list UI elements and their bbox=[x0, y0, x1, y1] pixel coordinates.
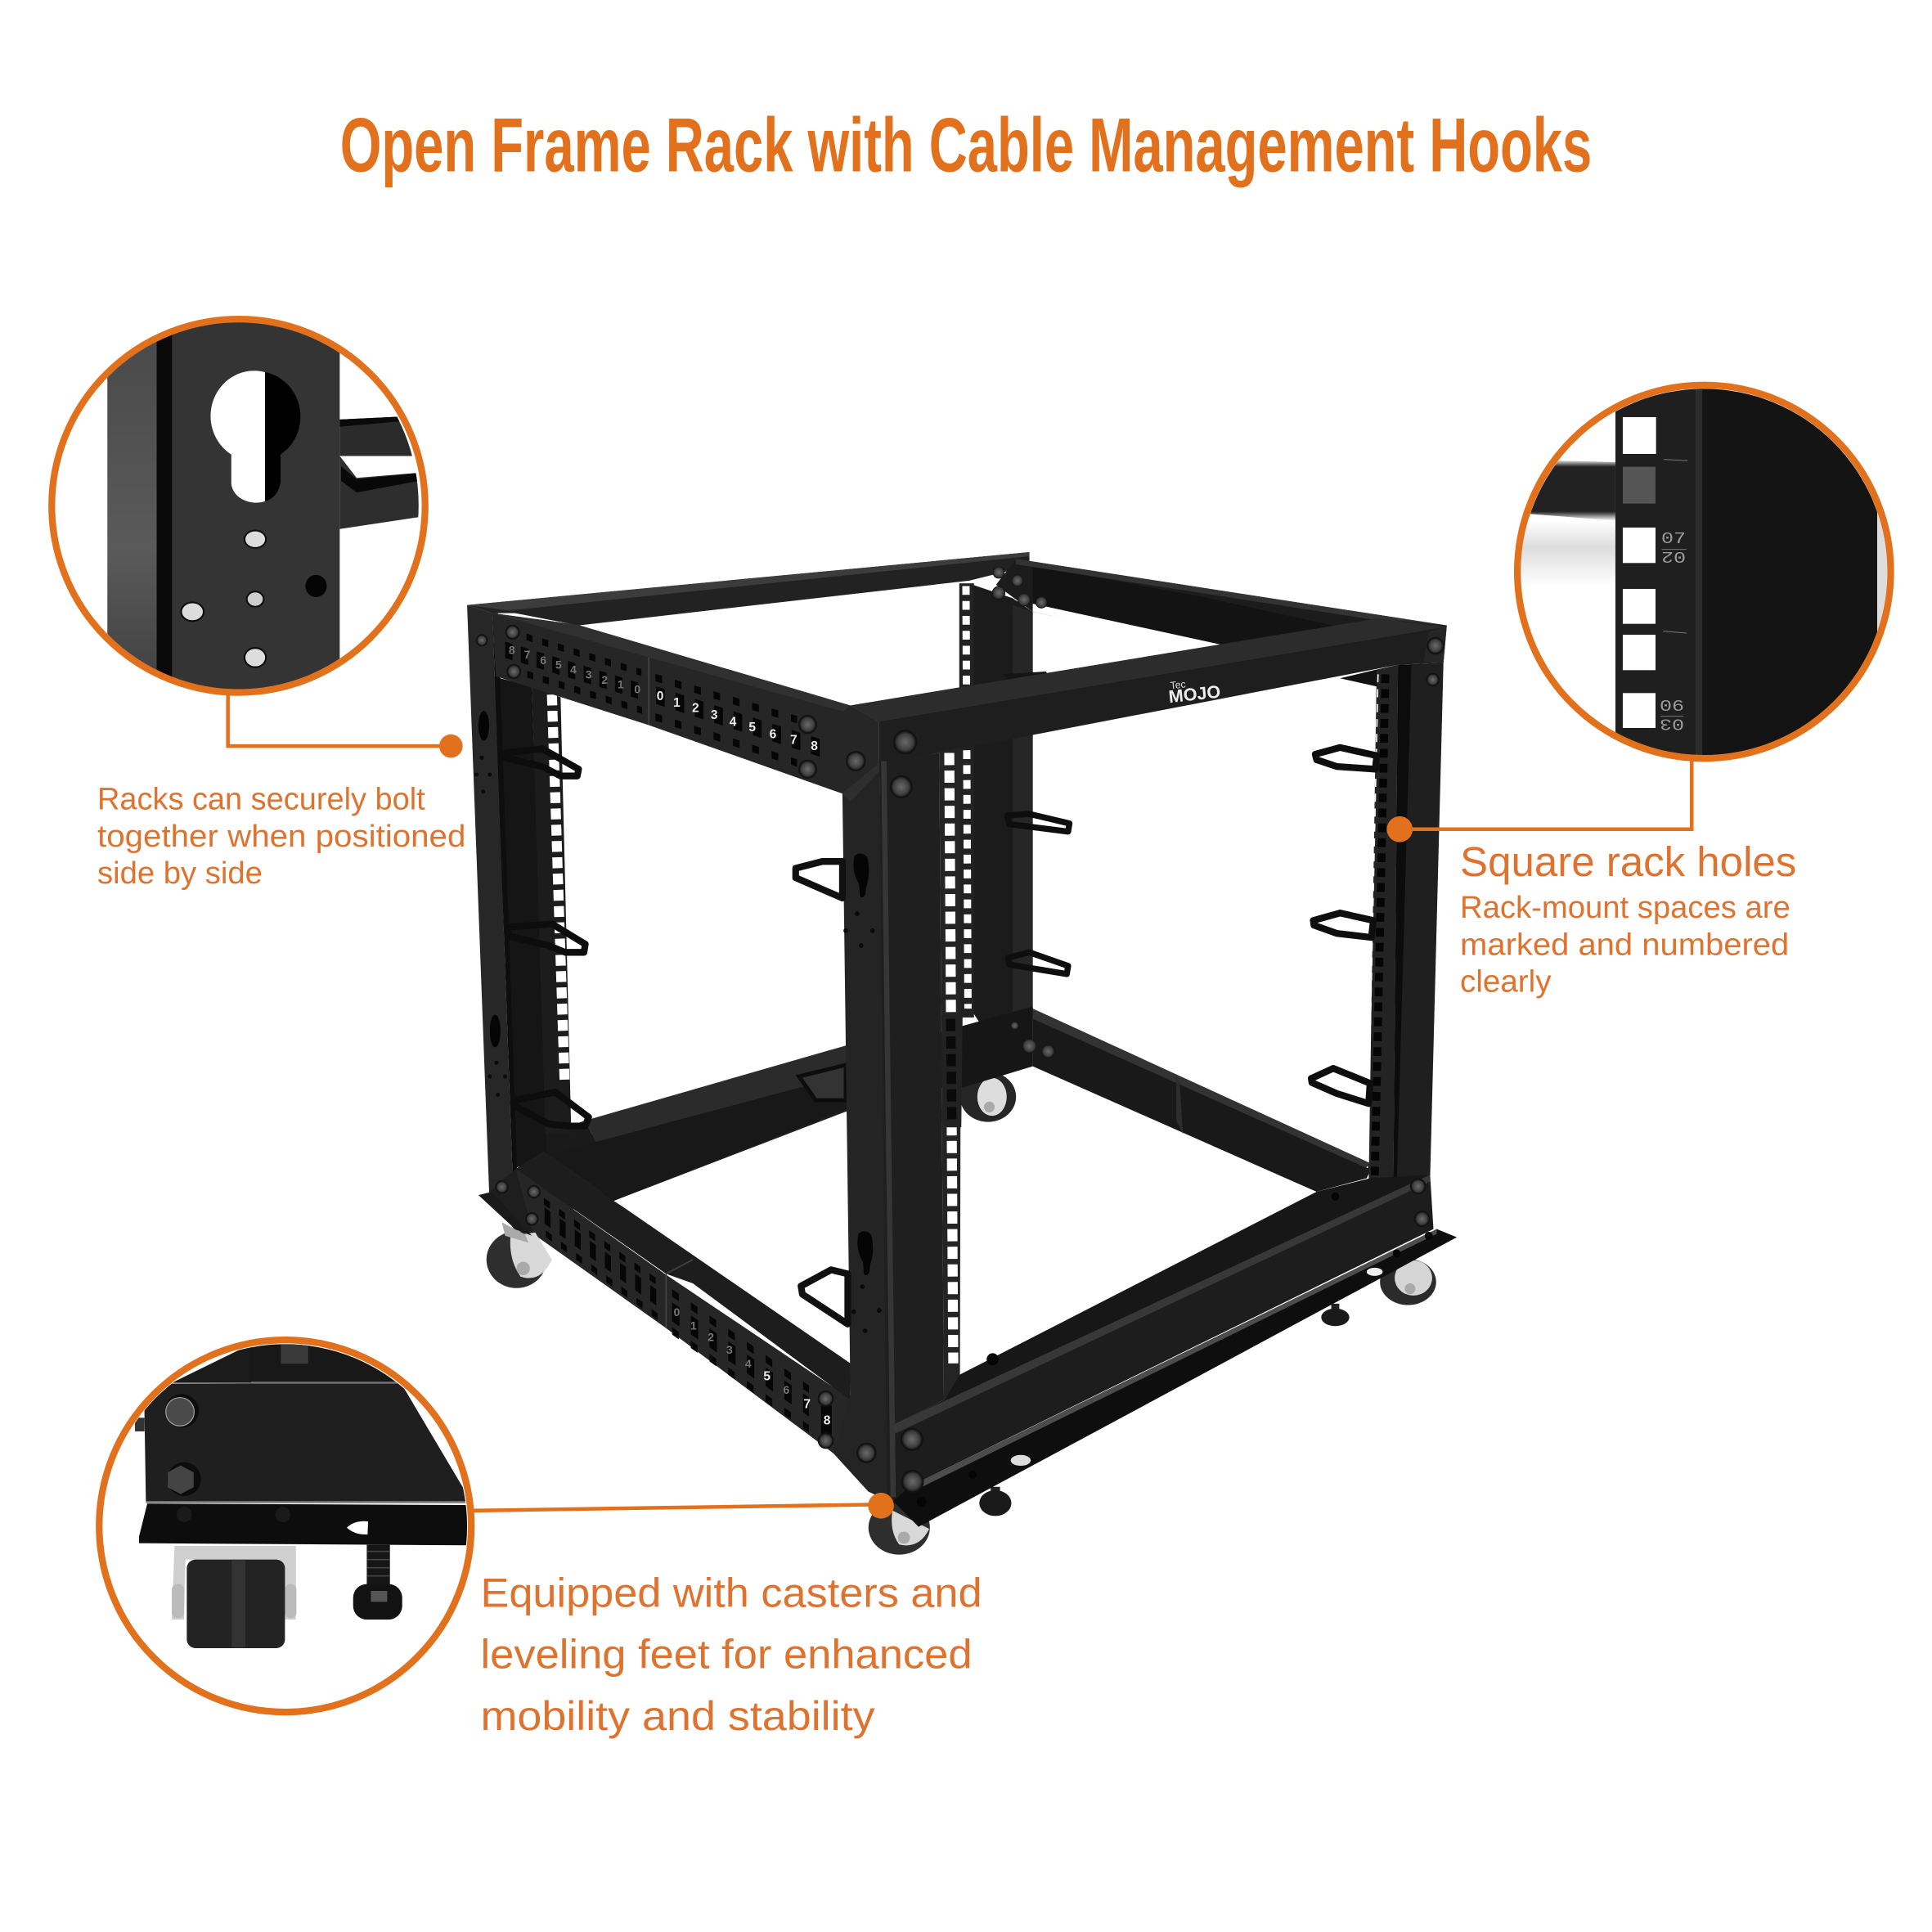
text block: bolt-together: side by side bbox=[97, 856, 263, 890]
front caster bbox=[869, 1500, 930, 1555]
panel numbers: 0 bbox=[657, 690, 664, 703]
bottom panel numbers: 8 bbox=[824, 1413, 831, 1427]
description bbox=[1460, 890, 1790, 999]
left base flange and caster bbox=[479, 1192, 552, 1288]
text block: bolt-together: Racks can securely bolt bbox=[97, 782, 425, 816]
panel numbers: 2 bbox=[601, 673, 608, 686]
panel numbers: 1 bbox=[618, 678, 624, 691]
bottom panel numbers: 3 bbox=[726, 1343, 733, 1356]
bottom panel numbers: 4 bbox=[745, 1357, 752, 1370]
panel numbers: 7 bbox=[524, 648, 531, 661]
bottom panel numbers: 6 bbox=[783, 1383, 789, 1396]
callout leader: bolt-together bbox=[228, 694, 463, 757]
description: Rack-mount spaces are bbox=[1460, 890, 1790, 924]
rail numbers: 03 bbox=[1660, 714, 1684, 732]
detail photo: keyhole slot bbox=[107, 322, 419, 689]
panel numbers bbox=[509, 643, 818, 753]
panel numbers: 6 bbox=[770, 727, 777, 741]
bottom panel numbers: 0 bbox=[674, 1305, 681, 1319]
leveling foot front bbox=[979, 1487, 1011, 1516]
panel: square rack holes detail bbox=[1513, 368, 1894, 777]
panel numbers: 4 bbox=[730, 715, 737, 729]
rail numbers: 07 bbox=[1661, 530, 1686, 548]
panel numbers: 5 bbox=[555, 658, 562, 672]
detail circle outline bbox=[99, 1340, 471, 1712]
front post hooks bbox=[796, 861, 847, 1324]
front post bbox=[833, 753, 944, 1503]
back top rails bbox=[467, 552, 1447, 649]
right post with rack rail bbox=[1340, 663, 1444, 1185]
rail numbers: 02 bbox=[1661, 547, 1686, 565]
panel numbers: 4 bbox=[570, 663, 577, 676]
panel numbers: 3 bbox=[711, 708, 718, 722]
panel numbers: 6 bbox=[540, 654, 546, 667]
rail numbers: 06 bbox=[1660, 698, 1684, 716]
top left side panel with holes and numbers bbox=[492, 613, 879, 793]
leveling foot rear bbox=[1321, 1304, 1350, 1326]
bolts bbox=[476, 626, 1444, 1492]
panel: bolt-together detail bbox=[52, 303, 427, 712]
text block: bolt-together bbox=[97, 782, 465, 890]
bottom panel numbers: 1 bbox=[690, 1319, 697, 1332]
detail photo: rail holes bbox=[1521, 389, 1888, 755]
text block: square rack holes bbox=[1460, 838, 1796, 999]
description: clearly bbox=[1460, 964, 1552, 999]
panel numbers: 8 bbox=[509, 643, 515, 656]
panel numbers: 0 bbox=[634, 682, 640, 696]
front rack rail bbox=[939, 748, 963, 1400]
top front rail bbox=[851, 618, 1447, 762]
panel numbers: 1 bbox=[673, 696, 681, 710]
heading: Square rack holes bbox=[1460, 838, 1796, 885]
rail numbers bbox=[1660, 530, 1686, 732]
callout leader: square rack holes bbox=[1386, 759, 1692, 842]
panel numbers: 3 bbox=[586, 667, 592, 681]
back caster wheel bbox=[960, 1072, 1016, 1122]
bottom front rail and flange bbox=[869, 1175, 1457, 1527]
rack photo illustration bbox=[467, 552, 1457, 1555]
detail circle outline bbox=[52, 319, 425, 693]
back post hooks bbox=[1008, 814, 1070, 974]
front right caster bbox=[1380, 1259, 1436, 1305]
panel numbers: 5 bbox=[748, 721, 756, 735]
back floor rails bbox=[546, 1009, 1373, 1206]
logo: Tec bbox=[1170, 678, 1186, 691]
back post with rack rail bbox=[939, 583, 1051, 1088]
text block: casters and leveling feet: mobility and stability bbox=[480, 1693, 875, 1739]
callout leader: casters bbox=[473, 1493, 894, 1519]
text block: casters and leveling feet: Equipped with casters and bbox=[480, 1570, 982, 1615]
panel numbers: 8 bbox=[811, 739, 818, 753]
description: marked and numbered bbox=[1460, 927, 1789, 961]
text block: casters and leveling feet bbox=[480, 1570, 982, 1739]
left post hooks bbox=[505, 749, 589, 1126]
left rack rail bbox=[532, 686, 571, 1134]
bottom left side panel with holes bbox=[489, 1151, 869, 1492]
right post hooks bbox=[1311, 748, 1377, 1103]
text block: casters and leveling feet: leveling feet for enhanced bbox=[480, 1632, 973, 1678]
text block: bolt-together: together when positioned bbox=[97, 819, 465, 853]
panel numbers: 2 bbox=[692, 702, 699, 716]
bottom panel numbers: 5 bbox=[763, 1369, 771, 1384]
detail circle outline bbox=[1517, 385, 1891, 758]
bottom panel numbers: 7 bbox=[803, 1397, 811, 1412]
bottom panel numbers: 2 bbox=[708, 1330, 714, 1343]
back bolts bbox=[992, 566, 1055, 1058]
panel numbers: 7 bbox=[790, 734, 798, 748]
left post bbox=[467, 605, 547, 1229]
detail photo: caster and foot bbox=[135, 1344, 473, 1648]
logo: MOJO bbox=[1168, 681, 1221, 707]
bottom panel numbers bbox=[674, 1305, 832, 1436]
panel: casters and leveling feet detail bbox=[99, 1340, 473, 1712]
